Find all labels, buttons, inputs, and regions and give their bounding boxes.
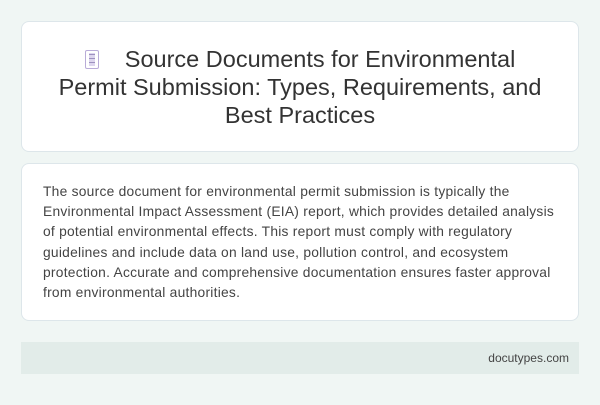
title: Source Documents for Environmental <box>125 46 515 72</box>
description text: from environmental authorities. <box>43 285 240 300</box>
title <box>59 46 541 128</box>
footer: docutypes.com <box>488 351 569 365</box>
title: Best Practices <box>225 102 375 128</box>
description text: Environmental Impact Assessment (EIA) report, which provides detailed analysis <box>43 204 554 219</box>
footer <box>21 342 579 374</box>
description text <box>43 184 554 300</box>
description text: guidelines and include data on land use, pollution control, and ecosystem <box>43 245 508 260</box>
description text: protection. Accurate and comprehensive documentation ensures faster approval <box>43 265 551 280</box>
description panel <box>21 163 579 321</box>
description text: The source document for environmental permit submission is typically the <box>43 184 510 199</box>
title: Permit Submission: Types, Requirements, and <box>59 74 541 100</box>
header card <box>21 21 579 152</box>
description text: of potential environmental effects. This report must comply with regulatory <box>43 224 512 239</box>
